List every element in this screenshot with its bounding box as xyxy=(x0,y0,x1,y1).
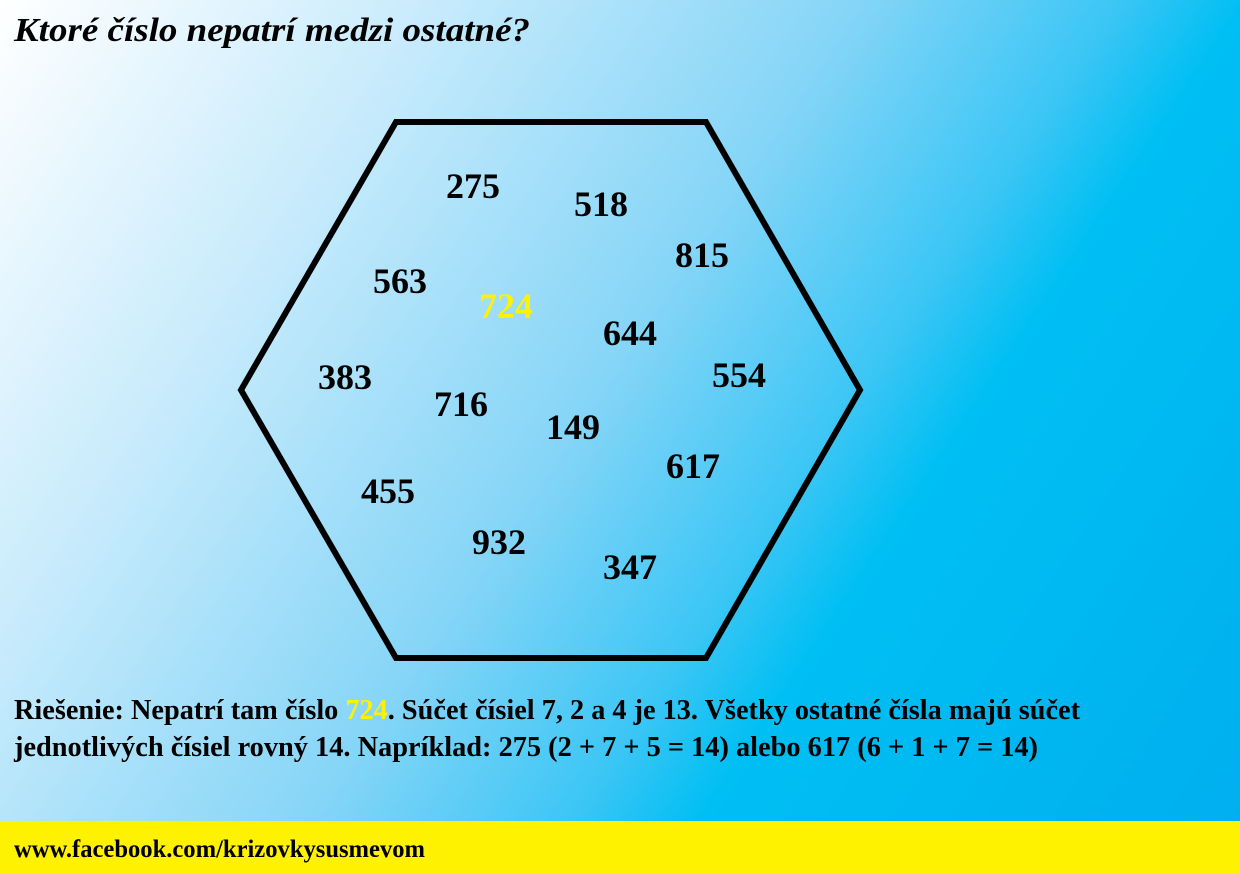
number grid: 347 xyxy=(603,547,657,587)
number grid: 932 xyxy=(472,522,526,562)
number grid: 617 xyxy=(666,446,720,486)
solution text: Riešenie: Nepatrí tam číslo 724. Súčet čísiel 7, 2 a 4 je 13. Všetky ostatné čísla majú súčet xyxy=(14,695,1081,726)
hexagon outline xyxy=(241,122,860,658)
number grid: 724 xyxy=(479,286,533,326)
number grid: 554 xyxy=(712,355,766,395)
number grid: 149 xyxy=(546,407,600,447)
title: Ktoré číslo nepatrí medzi ostatné? xyxy=(13,12,530,49)
footer bar xyxy=(0,821,1240,874)
number grid: 815 xyxy=(675,235,729,275)
number grid: 716 xyxy=(434,384,488,424)
number grid: 275 xyxy=(446,166,500,206)
solution text: jednotlivých čísiel rovný 14. Napríklad: 275 (2 + 7 + 5 = 14) alebo 617 (6 + 1 + 7 = 14) xyxy=(13,732,1038,763)
number grid: 455 xyxy=(361,471,415,511)
solution text xyxy=(13,695,1081,763)
number grid: 563 xyxy=(373,261,427,301)
number grid xyxy=(318,166,766,587)
footer link text: www.facebook.com/krizovkysusmevom xyxy=(14,836,425,863)
number grid: 518 xyxy=(574,184,628,224)
number grid: 383 xyxy=(318,357,372,397)
number grid: 644 xyxy=(603,313,657,353)
